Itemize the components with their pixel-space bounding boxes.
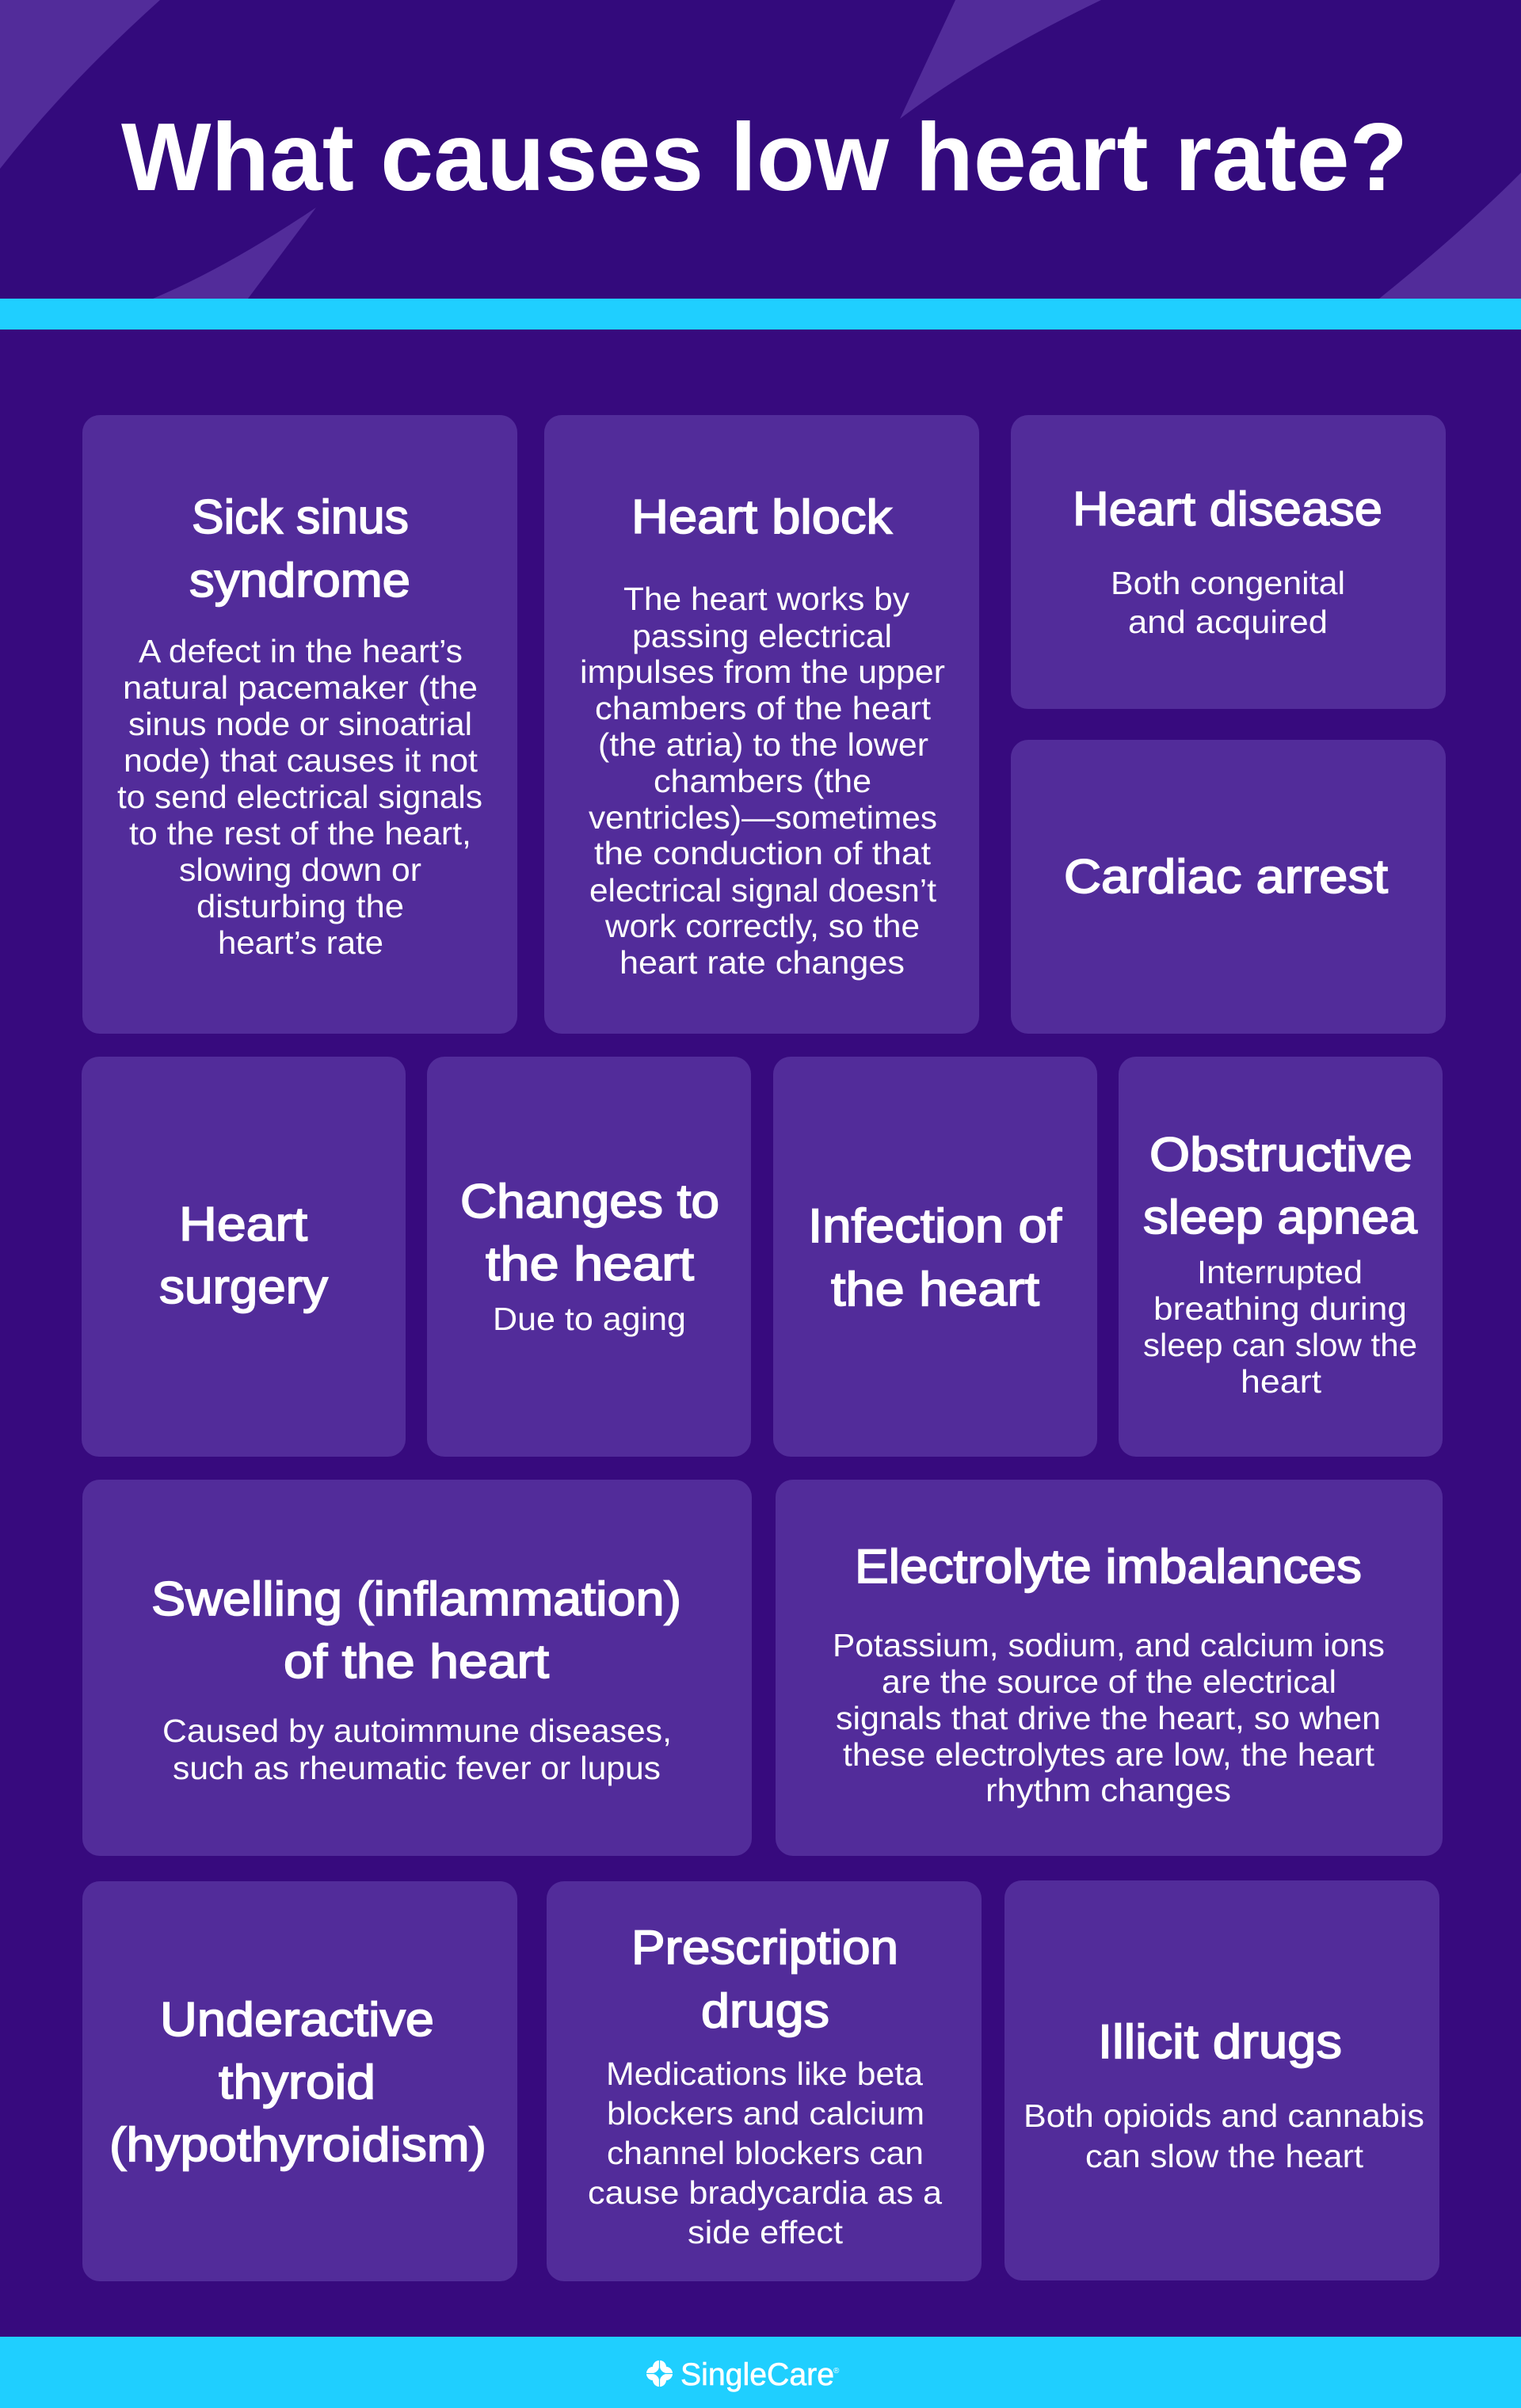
body text: ventricles)—sometimes [589, 799, 937, 836]
body text: heart rate changes [619, 944, 905, 981]
panel: Sick sinus syndrome [82, 415, 517, 1034]
body text: are the source of the electrical [882, 1663, 1336, 1700]
heading: Prescription drugs: Prescription [631, 1921, 898, 1974]
header band [0, 0, 1521, 299]
body text: to the rest of the heart, [129, 815, 471, 852]
body text: sleep can slow the [1143, 1327, 1417, 1363]
body text: blockers and calcium [607, 2095, 924, 2132]
body text: Interrupted [1197, 1254, 1363, 1290]
body text: side effect [688, 2214, 844, 2250]
heading: Underactive thyroid (hypothyroidism): thyroid [219, 2056, 375, 2109]
heading: Underactive thyroid (hypothyroidism): (hypothyroidism) [109, 2118, 486, 2171]
heading: Obstructive sleep apnea: sleep apnea [1143, 1191, 1418, 1244]
body text: Potassium, sodium, and calcium ions [833, 1627, 1385, 1663]
panel: Illicit drugs [1004, 1880, 1439, 2280]
decorative shard: top centre [900, 0, 1101, 119]
heading: Swelling (inflammation) of the heart [151, 1572, 681, 1688]
heading: Changes to the heart: the heart [486, 1237, 694, 1290]
title: What causes low heart rate? [121, 103, 1408, 211]
heading: Underactive thyroid (hypothyroidism): Underactive [160, 1993, 434, 2046]
heading: Sick sinus syndrome: Sick sinus [192, 490, 409, 543]
panel: Infection of the heart [773, 1057, 1097, 1457]
heading: Obstructive sleep apnea: Obstructive [1149, 1128, 1412, 1181]
body text: sinus node or sinoatrial [128, 706, 472, 742]
decorative shard: right [1379, 173, 1521, 299]
body text: natural pacemaker (the [123, 669, 478, 706]
heading: Sick sinus syndrome [189, 490, 410, 607]
panel: Underactive thyroid [82, 1881, 517, 2281]
heading: Prescription drugs: drugs [701, 1984, 829, 2037]
body text: (the atria) to the lower [598, 726, 928, 763]
body text: channel blockers can [607, 2135, 924, 2171]
body text: Both opioids and cannabis [1024, 2097, 1424, 2134]
body text: electrical signal doesn’t [589, 872, 937, 909]
body text: Medications like beta [606, 2056, 923, 2092]
body text: node) that causes it not [124, 742, 478, 779]
panel: Obstructive sleep apnea [1119, 1057, 1443, 1457]
body text: such as rheumatic fever or lupus [173, 1750, 661, 1786]
heading: Changes to the heart: Changes to [460, 1175, 719, 1228]
body text: disturbing the [196, 888, 404, 924]
heading: Illicit drugs: Illicit drugs [1098, 2015, 1342, 2068]
body text: Both congenital [1111, 565, 1345, 601]
heading: Heart surgery: Heart [179, 1198, 307, 1251]
body text: Caused by autoimmune diseases, [162, 1713, 672, 1749]
body text: slowing down or [179, 852, 421, 888]
heading: Underactive thyroid (hypothyroidism) [109, 1993, 486, 2171]
panel: Electrolyte imbalances [776, 1480, 1443, 1856]
body text: chambers of the heart [595, 690, 932, 726]
heading: Cardiac arrest: Cardiac arrest [1064, 850, 1388, 903]
body text: to send electrical signals [117, 779, 482, 815]
decorative shard: top left [0, 0, 160, 169]
body text: breathing during [1153, 1290, 1407, 1327]
heading: Infection of the heart [808, 1199, 1062, 1316]
panel: Swelling of the heart [82, 1480, 752, 1856]
body text: these electrolytes are low, the heart [843, 1736, 1375, 1773]
heading: Swelling (inflammation) of the heart: of the heart [284, 1635, 549, 1688]
registered mark: ® [833, 2367, 840, 2376]
body text [162, 1713, 672, 1786]
panel: Heart disease [1011, 415, 1446, 709]
body text: passing electrical [632, 618, 892, 654]
panel: Changes to the heart [427, 1057, 751, 1457]
heading: Electrolyte imbalances: Electrolyte imbalances [855, 1540, 1362, 1593]
footer bar [0, 2337, 1521, 2408]
panel: Prescription drugs [547, 1881, 982, 2281]
heading: Prescription drugs [631, 1921, 898, 2037]
body text: A defect in the heart’s [139, 633, 463, 669]
heading: Sick sinus syndrome: syndrome [189, 554, 410, 607]
heading: Heart disease: Heart disease [1073, 482, 1382, 535]
body text: heart [1241, 1363, 1322, 1400]
body text [1143, 1254, 1417, 1400]
body text [833, 1627, 1385, 1808]
heading: Infection of the heart: the heart [831, 1263, 1039, 1316]
body text: Due to aging [493, 1301, 686, 1337]
decorative shard: bottom left [153, 208, 316, 299]
heading: Heart surgery: surgery [159, 1260, 328, 1313]
body text [580, 581, 945, 981]
heading: Swelling (inflammation) of the heart: Swelling (inflammation) [151, 1572, 681, 1625]
panel: Heart surgery [82, 1057, 406, 1457]
body text [117, 633, 482, 961]
heading: Heart block: Heart block [631, 490, 893, 543]
heading: Obstructive sleep apnea [1143, 1128, 1418, 1244]
body text: the conduction of that [594, 835, 932, 871]
body text: The heart works by [623, 581, 910, 617]
panel: Cardiac arrest [1011, 740, 1446, 1034]
logo: SingleCare [646, 2357, 840, 2392]
body text: impulses from the upper [580, 653, 945, 690]
body text: and acquired [1128, 604, 1328, 640]
body text: cause bradycardia as a [588, 2174, 942, 2211]
body text: rhythm changes [985, 1772, 1231, 1808]
panel: Heart block [544, 415, 979, 1034]
wordmark: SingleCare [680, 2357, 834, 2392]
heading: Heart surgery [159, 1198, 328, 1313]
icon: SingleCare cross mark [646, 2360, 673, 2387]
body text [1111, 565, 1345, 640]
body text: can slow the heart [1085, 2138, 1364, 2174]
heading: Infection of the heart: Infection of [808, 1199, 1062, 1252]
body text [588, 2056, 942, 2250]
body text [1024, 2097, 1424, 2174]
body text: work correctly, so the [604, 908, 920, 944]
body text: chambers (the [654, 763, 871, 799]
body text: signals that drive the heart, so when [836, 1700, 1381, 1736]
body text: heart’s rate [218, 924, 383, 961]
heading: Changes to the heart [460, 1175, 719, 1290]
cyan divider bar [0, 299, 1521, 330]
